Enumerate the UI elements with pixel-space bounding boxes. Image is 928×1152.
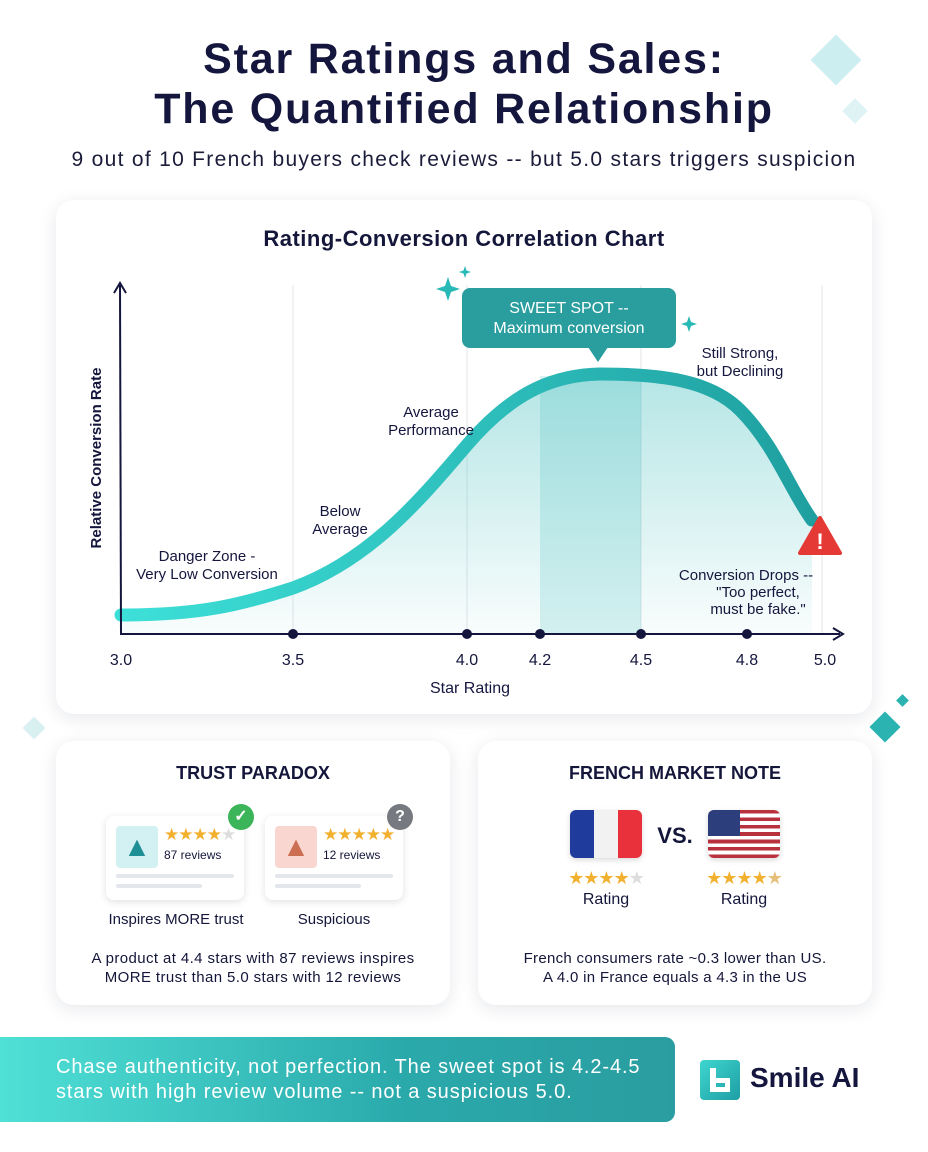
- panel: trust paradox: Suspicious: [298, 911, 370, 928]
- line chart: Very Low Conversion: [136, 566, 278, 583]
- title: [154, 35, 774, 133]
- product card: suspicious: ▲: [282, 831, 310, 862]
- icon: warning: [800, 518, 840, 554]
- line chart: Star Rating: [430, 680, 510, 697]
- callout: sweet spot: SWEET SPOT --: [509, 300, 629, 317]
- ratings: ★★★★★: [568, 868, 644, 888]
- panel: french market note: ★★★★★: [706, 868, 782, 888]
- logo: [700, 1060, 859, 1100]
- line chart: Relative Conversion Rate: [88, 368, 105, 548]
- heading: FRENCH MARKET NOTE: [569, 763, 781, 783]
- banner: takeaway: stars with high review volume -- not a suspicious 5.0.: [56, 1081, 573, 1103]
- product card: trusted: ▲: [123, 831, 151, 862]
- product card: trusted: ★★★★★: [164, 825, 235, 844]
- product card: suspicious: 12 reviews: [323, 848, 380, 862]
- text: A product at 4.4 stars with 87 reviews inspires: [91, 950, 415, 967]
- line chart: 4.8: [736, 652, 758, 669]
- decoration: diamonds: [810, 34, 868, 124]
- line chart: 4.5: [630, 652, 652, 669]
- callout: sweet spot: Maximum conversion: [493, 320, 645, 337]
- line chart: Still Strong,: [702, 345, 778, 362]
- line chart: 3.0: [110, 652, 132, 669]
- decoration: diamonds mid: [23, 694, 909, 742]
- title: Star Ratings and Sales:: [203, 35, 725, 83]
- icon: warning: !: [816, 529, 824, 554]
- product card: trusted: 87 reviews: [164, 848, 221, 862]
- text: MORE trust than 5.0 stars with 12 reviews: [105, 969, 401, 986]
- text: [524, 950, 826, 986]
- line chart: 4.2: [529, 652, 551, 669]
- text: A 4.0 in France equals a 4.3 in the US: [543, 969, 807, 986]
- callout: sweet spot: [462, 288, 676, 362]
- text: [91, 950, 415, 986]
- line chart: [88, 266, 845, 697]
- line chart: but Declining: [697, 363, 783, 380]
- line chart: "Too perfect,: [716, 584, 800, 601]
- line chart: 4.0: [456, 652, 478, 669]
- product card: trusted: [106, 816, 244, 900]
- icon: question: [387, 804, 413, 830]
- title: The Quantified Relationship: [154, 85, 774, 133]
- panel: french market note: Rating: [721, 891, 767, 908]
- banner: takeaway: Chase authenticity, not perfection. The sweet spot is 4.2-4.5: [56, 1056, 640, 1078]
- icon: check: [228, 804, 254, 830]
- line chart: Average: [403, 404, 459, 421]
- banner: takeaway: [0, 1037, 675, 1122]
- labels: Inspires MORE trust: [108, 911, 244, 928]
- line chart: 3.5: [282, 652, 304, 669]
- heading: TRUST PARADOX: [176, 763, 330, 783]
- line chart: Average: [312, 521, 368, 538]
- icon: check: ✓: [234, 808, 248, 825]
- line chart: Danger Zone -: [159, 548, 255, 565]
- product card: suspicious: [265, 816, 403, 900]
- line chart: Performance: [388, 422, 474, 439]
- panel: trust paradox: [56, 741, 450, 1005]
- panel: chart: [56, 200, 872, 714]
- line chart: Below: [320, 503, 361, 520]
- icon: question: ?: [395, 808, 405, 825]
- icon: French flag: [570, 810, 642, 858]
- text: French consumers rate ~0.3 lower than US.: [524, 950, 826, 967]
- subtitle: 9 out of 10 French buyers check reviews -- but 5.0 stars triggers suspicion: [72, 148, 856, 171]
- vs: VS.: [657, 823, 693, 848]
- line chart: Conversion Drops --: [679, 567, 813, 584]
- chart title: Rating-Conversion Correlation Chart: [263, 226, 665, 251]
- panel: french market note: Rating: [583, 891, 629, 908]
- icon: US flag: [708, 810, 780, 858]
- panel: french market note: [478, 741, 872, 1005]
- line chart: 5.0: [814, 652, 836, 669]
- product card: suspicious: ★★★★★: [323, 825, 394, 844]
- logo: Smile AI: [750, 1062, 859, 1093]
- line chart: must be fake.": [710, 601, 806, 618]
